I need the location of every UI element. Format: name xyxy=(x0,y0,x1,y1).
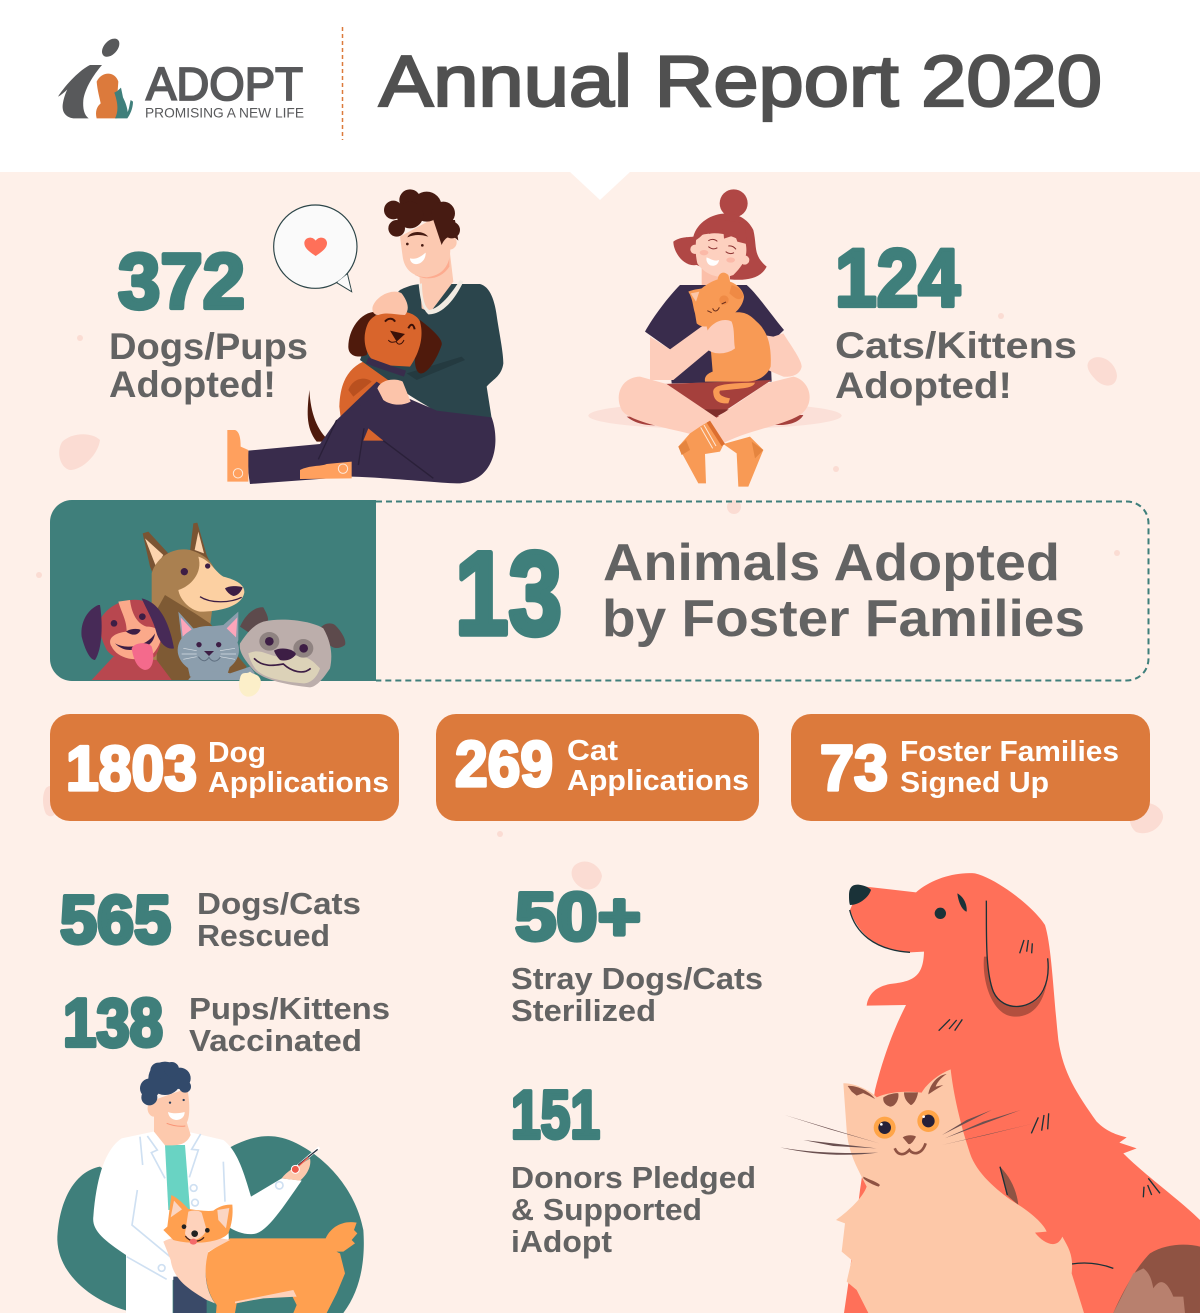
hand and thermometer xyxy=(282,1158,310,1181)
face xyxy=(696,233,746,277)
dog collar xyxy=(366,357,406,377)
stat: rescued xyxy=(60,882,361,958)
card: cat applications: Applications xyxy=(567,765,749,797)
whiskers xyxy=(780,1110,1034,1155)
dog tail xyxy=(308,390,330,442)
smile xyxy=(168,1112,185,1120)
logo: wordmark: ADOPT xyxy=(146,58,303,110)
header band xyxy=(0,0,1200,200)
cat body xyxy=(836,1069,1084,1313)
card: foster signups: Signed Up xyxy=(900,767,1049,799)
stat: vaccinated xyxy=(63,985,390,1061)
legs xyxy=(619,377,720,437)
sweater xyxy=(360,284,503,421)
ground shadow xyxy=(588,402,842,429)
background blobs and dots xyxy=(36,313,1163,890)
teal shirt xyxy=(165,1145,190,1210)
hind leg patch xyxy=(1113,1245,1200,1313)
brown dog xyxy=(143,523,247,680)
fringe xyxy=(695,218,747,244)
shoes xyxy=(227,430,248,482)
stat: vaccinated: Vaccinated xyxy=(189,1023,362,1058)
card: foster signups: Foster Families xyxy=(900,736,1119,768)
red dog body xyxy=(844,873,1200,1313)
cat tail xyxy=(713,383,755,403)
card: cat applications: 269 xyxy=(455,728,553,800)
socks xyxy=(723,437,763,487)
stat: cats adopted: 124 xyxy=(835,233,960,324)
foster label: Animals Adopted xyxy=(603,534,1060,592)
stat: dogs adopted: Adopted! xyxy=(109,364,276,405)
neck xyxy=(154,1110,191,1145)
stat: sterilized: Stray Dogs/Cats xyxy=(511,961,763,996)
hands xyxy=(705,320,735,353)
neck xyxy=(419,253,453,313)
dog ears and head xyxy=(348,312,377,357)
illustration: pets xyxy=(81,523,345,697)
stat: sterilized xyxy=(511,879,763,1028)
arms xyxy=(650,322,713,380)
teal blob xyxy=(57,1136,364,1313)
smile xyxy=(706,257,719,266)
stat: donors: Donors Pledged xyxy=(511,1160,756,1195)
illustration: vet with corgi xyxy=(57,1062,364,1313)
lab coat xyxy=(93,1132,302,1313)
shirt xyxy=(645,285,784,383)
stat: dogs adopted: 372 xyxy=(118,237,245,325)
mouth line xyxy=(850,910,910,952)
stat: cats adopted xyxy=(835,233,1077,406)
stat: donors xyxy=(511,1077,756,1259)
illustration: man hugging dog xyxy=(227,189,503,484)
illustration: red dog with cat xyxy=(780,873,1200,1313)
stat: donors: 151 xyxy=(511,1077,600,1153)
dog body xyxy=(339,360,410,440)
panel: foster families: by Foster Families xyxy=(602,590,1085,648)
stat: cats adopted: Adopted! xyxy=(835,365,1012,406)
card: foster signups: 73 xyxy=(820,732,888,804)
title: Annual Report 2020 xyxy=(379,42,1102,122)
stat: dogs adopted xyxy=(109,237,308,405)
cat head xyxy=(688,273,744,326)
panel: foster families xyxy=(50,500,1148,697)
red dog xyxy=(81,598,174,680)
pants xyxy=(248,382,495,484)
stat: donors: iAdopt xyxy=(511,1224,612,1259)
shorts xyxy=(663,380,772,417)
stat: rescued: Rescued xyxy=(197,918,330,953)
stat: rescued: Dogs/Cats xyxy=(197,886,361,921)
neck xyxy=(702,267,730,290)
card: foster signups xyxy=(791,714,1150,821)
trousers xyxy=(173,1277,207,1313)
stat: vaccinated: Pups/Kittens xyxy=(189,991,390,1026)
stat: donors: & Supported xyxy=(511,1192,702,1227)
head xyxy=(148,1088,189,1127)
card: cat applications xyxy=(436,714,759,821)
fur marks xyxy=(939,940,1160,1197)
paw xyxy=(239,672,261,697)
eyes and cheeks xyxy=(708,239,736,254)
grey cat xyxy=(178,612,255,680)
cat stripes and ears xyxy=(848,1074,947,1187)
pug xyxy=(240,607,345,687)
stat: sterilized: Sterilized xyxy=(511,993,656,1028)
logo: tagline: PROMISING A NEW LIFE xyxy=(145,104,304,120)
head xyxy=(400,217,450,277)
card: cat applications: Cat xyxy=(567,735,618,767)
stat: vaccinated: 138 xyxy=(63,985,163,1061)
card: dog applications: 1803 xyxy=(66,734,197,804)
ear xyxy=(984,957,1048,1017)
eye xyxy=(935,908,946,919)
foster number: 13 xyxy=(455,528,562,660)
card: dog applications: Dog xyxy=(208,737,266,769)
shorts back xyxy=(627,415,803,425)
hair xyxy=(384,189,460,245)
hair xyxy=(140,1062,191,1105)
stat: dogs adopted: Dogs/Pups xyxy=(109,326,308,367)
cat mouth xyxy=(895,1143,926,1154)
logo: person icon xyxy=(58,35,123,118)
logo xyxy=(58,35,304,120)
nose xyxy=(849,885,871,905)
cat eyes xyxy=(874,1110,939,1139)
hair xyxy=(673,189,767,280)
dog paw xyxy=(348,379,372,397)
logo: cat xyxy=(114,88,133,118)
face details xyxy=(407,232,428,237)
stat: sterilized: 50+ xyxy=(515,879,641,955)
orange gap under knee xyxy=(363,428,383,441)
card: dog applications: Applications xyxy=(208,767,389,799)
illustration: woman hugging cat xyxy=(588,189,842,487)
coat details xyxy=(127,1134,283,1279)
stat: rescued: 565 xyxy=(60,882,171,958)
logo: dog xyxy=(96,74,118,118)
man hand on head xyxy=(372,292,408,315)
cat body xyxy=(705,312,771,382)
man hand on knee xyxy=(377,380,411,405)
sweater shadow xyxy=(407,357,465,380)
corgi xyxy=(163,1195,357,1313)
stat: cats adopted: Cats/Kittens xyxy=(835,325,1077,366)
speech bubble with heart xyxy=(274,205,357,292)
card: dog applications xyxy=(50,714,399,821)
